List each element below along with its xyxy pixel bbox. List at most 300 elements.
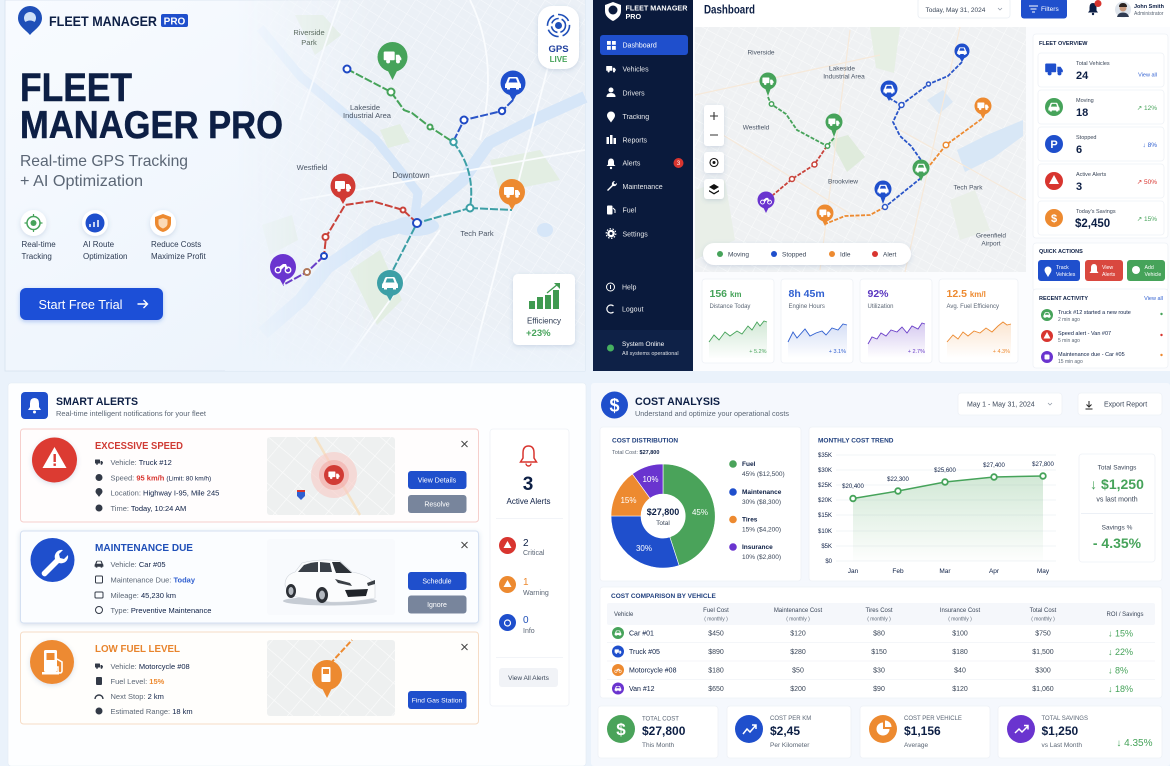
panel: fleet overview	[1033, 34, 1168, 238]
icon: fuel pump	[30, 640, 74, 684]
user avatar	[1115, 2, 1131, 18]
kpi: cost per vehicle: $1,156	[904, 724, 941, 738]
row: van 12: $120	[952, 686, 968, 693]
pin: blue car	[500, 70, 526, 101]
action: view alerts	[1085, 260, 1123, 281]
panel: recent activity: RECENT ACTIVITY	[1039, 296, 1088, 302]
maintenance details: Mileage: 45,230 km	[110, 591, 176, 600]
panel: active alerts summary: Active Alerts	[506, 497, 551, 506]
fuel details	[95, 662, 193, 716]
close button	[462, 441, 468, 447]
kpi: total cost: This Month	[642, 742, 675, 749]
kpi: total savings: vs Last Month	[1042, 742, 1082, 749]
badge: gps live: LIVE	[550, 55, 568, 64]
smart alerts header	[21, 392, 206, 419]
sidebar logo: PRO	[626, 12, 641, 21]
logo: FLEET MANAGER	[49, 13, 157, 29]
stat card: distance today: + 5.2%	[749, 349, 767, 355]
filters button	[1021, 0, 1067, 18]
action: track vehicles: Vehicles	[1056, 272, 1076, 278]
line chart: $20,400	[842, 484, 864, 490]
alert details: Time: Today, 10:24 AM	[110, 504, 186, 513]
kpi: total cost: TOTAL COST	[642, 716, 679, 722]
card: cost distribution: Total Cost: $27,800	[612, 450, 659, 456]
row: total vehicles	[1038, 53, 1164, 87]
activity: truck started: Truck #12 started a new route	[1058, 310, 1131, 316]
button: ignore	[408, 596, 466, 614]
menu items: Fuel	[622, 208, 637, 214]
notification bell	[1088, 0, 1102, 15]
table header: ( monthly )	[867, 616, 891, 622]
count: warning: Warning	[523, 590, 549, 597]
sparkline: utilization	[868, 323, 925, 358]
action: track vehicles	[1038, 260, 1080, 281]
feature: ai route optimization: AI Route	[83, 240, 115, 249]
title: FLEET	[20, 66, 132, 110]
row: car 01: ↓ 15%	[1108, 628, 1133, 638]
button: schedule: Schedule	[422, 578, 452, 586]
map place labels: Tech Park	[460, 229, 494, 238]
count: info	[499, 614, 535, 635]
cost analysis header: $	[609, 396, 620, 416]
row: van 12: ↓ 18%	[1108, 684, 1133, 694]
subtitle: + AI Optimization	[20, 173, 143, 190]
activity: maintenance due: Maintenance due - Car #05	[1058, 352, 1125, 358]
dashboard map labels: Greenfield	[976, 232, 1006, 240]
row: truck 05: $890	[708, 649, 724, 656]
savings summary: Total Savings	[1098, 464, 1137, 472]
stat card: engine hours: + 3.1%	[829, 349, 846, 355]
dashboard map labels: Tech Park	[954, 184, 983, 192]
efficiency bars	[529, 283, 560, 309]
button: view all alerts	[499, 668, 558, 687]
row: active alerts: 3	[1076, 181, 1082, 193]
stat card: utilization: Utilization	[868, 304, 894, 310]
dashboard pins	[758, 44, 992, 226]
donut legend: 10% ($2,800)	[742, 554, 781, 561]
menu items: Maintenance	[622, 184, 663, 191]
sidebar	[593, 0, 693, 371]
donut chart: Total	[656, 520, 670, 527]
kpi: total savings	[998, 706, 1162, 758]
pro badge: PRO	[164, 16, 186, 28]
action: view alerts: Alerts	[1102, 272, 1116, 278]
donut legend: 15% ($4,200)	[742, 526, 781, 534]
line chart: $22,300	[887, 477, 910, 483]
pro badge	[161, 14, 188, 28]
button: resolve	[408, 495, 466, 513]
button: view details: View Details	[418, 478, 457, 484]
kpi: total cost: $	[616, 720, 626, 739]
donut chart: 30%	[636, 544, 652, 553]
donut chart: 45%	[692, 508, 708, 517]
cost analysis header	[601, 392, 790, 418]
active menu item	[600, 35, 688, 55]
row: van 12	[612, 682, 1133, 694]
map legend: Idle	[840, 252, 851, 258]
panel: quick actions: QUICK ACTIONS	[1039, 249, 1083, 255]
savings summary: ↓ $1,250	[1090, 476, 1144, 492]
row: total vehicles: Total Vehicles	[1076, 61, 1110, 67]
system status	[607, 341, 679, 357]
panel: dashboard	[593, 0, 1170, 371]
maintenance details: Vehicle: Car #05	[110, 560, 166, 569]
card: cost distribution: COST DISTRIBUTION	[612, 438, 678, 444]
alert card: low fuel level	[20, 632, 478, 724]
savings summary: vs last month	[1096, 496, 1138, 504]
badge: efficiency: +23%	[526, 328, 551, 339]
line chart: Jan	[848, 568, 859, 575]
row: today's savings: ↗ 15%	[1137, 216, 1157, 223]
activity: truck started: 2 min ago	[1058, 317, 1080, 323]
card: cost comparison table: COST COMPARISON BY VEHICLE	[611, 593, 717, 600]
icon: bell	[520, 446, 536, 466]
row: motorcycle 08: $40	[954, 668, 966, 674]
line chart: $20K	[818, 498, 832, 504]
panel: cost analysis	[591, 383, 1170, 766]
user name	[1134, 4, 1165, 17]
pin: orange truck	[499, 179, 525, 210]
menu items: Help	[622, 284, 637, 292]
smart alerts header: SMART ALERTS	[56, 396, 138, 408]
line chart: $5K	[821, 544, 832, 550]
menu items: Dashboard	[622, 42, 657, 50]
stat card: distance today	[702, 279, 774, 363]
menu items: Drivers	[622, 90, 645, 98]
donut chart: 10%	[642, 475, 659, 484]
table header	[607, 603, 1155, 625]
kpi: total savings: ↓ 4.35%	[1116, 738, 1153, 749]
route network	[283, 69, 513, 285]
sparkline: engine	[788, 324, 847, 358]
count: info: 0	[523, 615, 529, 626]
map legend: Moving	[728, 252, 749, 258]
row: active alerts: Active Alerts	[1076, 172, 1107, 178]
system status: System Online	[622, 341, 665, 348]
line chart: $27,800	[1032, 462, 1054, 468]
panel: active alerts summary	[490, 429, 569, 706]
row: car 01: $750	[1035, 630, 1051, 638]
smart alerts header: Real-time intelligent notifications for your fleet	[56, 411, 206, 418]
alert details: Speed: 95 km/h (Limit: 80 km/h)	[110, 474, 211, 482]
subtitle: Real-time GPS Tracking	[20, 153, 188, 170]
row: truck 05: $1,500	[1032, 649, 1054, 656]
row: moving: ↗ 12%	[1137, 105, 1157, 112]
user name: Administrator	[1134, 11, 1164, 17]
maintenance details: Type: Preventive Maintenance	[110, 606, 211, 615]
row: van 12: $650	[708, 686, 724, 693]
pin: teal car	[377, 270, 403, 301]
row: today's savings: $	[1051, 213, 1057, 225]
row: car 01: $100	[952, 630, 968, 638]
row: motorcycle 08: $30	[873, 668, 885, 674]
card: cost distribution	[600, 427, 801, 581]
line chart: $35K	[818, 453, 832, 459]
row: today's savings: $2,450	[1075, 218, 1110, 230]
map place labels: Lakeside	[350, 103, 380, 112]
pin: purple motorcycle	[270, 254, 296, 285]
close button	[462, 644, 468, 650]
action: add vehicle: Vehicle	[1144, 272, 1161, 278]
row: van 12: $200	[790, 686, 806, 693]
row: van 12: $1,060	[1032, 686, 1054, 693]
activity: maintenance due	[1041, 351, 1163, 365]
kpi: cost per km: Per Kilometer	[770, 742, 810, 749]
menu items: Alerts	[622, 160, 641, 168]
kpi: total savings: TOTAL SAVINGS	[1042, 716, 1088, 722]
row: car 01: $450	[708, 630, 724, 638]
count: critical: 2	[523, 538, 529, 549]
row: motorcycle 08: ↓ 8%	[1108, 666, 1128, 676]
button: view all alerts: View All Alerts	[508, 675, 550, 682]
line chart	[818, 453, 1056, 575]
row: moving: 18	[1076, 107, 1088, 119]
alert card: maintenance due: MAINTENANCE DUE	[95, 542, 193, 554]
dashboard map labels: Riverside	[747, 50, 775, 56]
header	[693, 0, 1170, 27]
route nodes	[304, 66, 505, 275]
line chart: Feb	[892, 568, 904, 575]
feature: real-time tracking	[20, 210, 56, 261]
map: dashboard	[695, 27, 1026, 272]
cost analysis header: Understand and optimize your operational costs	[635, 411, 790, 418]
panel: quick actions	[1033, 243, 1168, 291]
button: schedule	[408, 572, 466, 590]
row: active alerts: ↗ 50%	[1137, 179, 1157, 186]
count: critical: Critical	[523, 550, 545, 557]
kpi: total cost: $27,800	[642, 724, 686, 738]
menu items: Logout	[622, 306, 643, 314]
alert details	[95, 458, 219, 513]
alerts badge	[674, 158, 684, 168]
icon: warning	[32, 438, 77, 482]
row: stopped: ↓ 8%	[1143, 142, 1157, 149]
row: motorcycle 08: Motorcycle #08	[629, 668, 677, 674]
stat card: utilization	[860, 279, 932, 363]
action: view alerts: View	[1102, 265, 1113, 271]
row: today's savings	[1038, 201, 1164, 235]
row: car 01: $80	[873, 630, 885, 638]
map legend: Stopped	[782, 252, 807, 258]
stat card: fuel efficiency: Avg. Fuel Efficiency	[946, 304, 999, 310]
stat card: distance today: 156 km	[710, 288, 742, 300]
kpi: cost per vehicle: COST PER VEHICLE	[904, 716, 962, 722]
icon: wrench	[30, 538, 74, 582]
sidebar logo	[605, 2, 688, 21]
map place labels: Riverside	[293, 28, 325, 37]
export report: Export Report	[1104, 402, 1147, 408]
dashboard map labels: Airport	[981, 240, 1001, 248]
feature: real-time tracking: Tracking	[22, 252, 52, 261]
button: resolve: Resolve	[424, 502, 450, 508]
feature: ai route optimization	[82, 210, 127, 261]
maintenance details: Maintenance Due: Today	[110, 576, 196, 584]
row: motorcycle 08: $180	[708, 668, 724, 674]
line chart: May	[1037, 568, 1050, 575]
table header: ( monthly )	[704, 616, 728, 622]
count: warning	[499, 576, 549, 597]
activity: maintenance due: 15 min ago	[1058, 359, 1083, 365]
pin: red truck	[330, 174, 356, 204]
map zoom control	[704, 105, 724, 146]
hero map	[225, 0, 585, 371]
badge: efficiency	[513, 274, 575, 345]
donut legend: Maintenance	[742, 489, 782, 496]
stat card: engine hours: 8h 45m	[788, 288, 825, 300]
row: motorcycle 08: $50	[792, 668, 804, 674]
line chart: Mar	[939, 568, 951, 575]
sparkline: distance	[709, 321, 767, 358]
date range	[958, 393, 1062, 415]
menu items	[622, 42, 663, 314]
sidebar logo: FLEET MANAGER	[626, 4, 688, 12]
alert details: Vehicle: Truck #12	[110, 458, 172, 467]
user name: John Smith	[1134, 4, 1165, 10]
savings summary	[1079, 454, 1155, 562]
menu items: Reports	[622, 138, 648, 144]
fuel details: Fuel Level: 15%	[110, 677, 165, 686]
alerts badge: 3	[677, 161, 681, 167]
map layers control	[704, 179, 724, 199]
dashboard routes	[768, 62, 983, 224]
kpi: cost per km: COST PER KM	[770, 716, 811, 722]
card: monthly cost trend	[809, 427, 1162, 581]
panel: smart alerts	[8, 383, 586, 766]
row: today's savings: Today's Savings	[1076, 209, 1116, 215]
savings summary: Savings %	[1102, 524, 1133, 532]
menu items: Settings	[622, 232, 648, 238]
dashboard map labels	[743, 50, 1006, 248]
map place labels	[293, 28, 494, 238]
savings summary: - 4.35%	[1093, 535, 1142, 551]
fuel details: Next Stop: 2 km	[110, 692, 164, 701]
dashboard map labels: Lakeside	[829, 66, 855, 72]
button: start free trial	[20, 288, 163, 320]
donut chart: $27,800	[647, 507, 679, 517]
line chart: $30K	[818, 468, 832, 474]
row: moving: Moving	[1076, 98, 1094, 104]
menu items: Tracking	[622, 114, 649, 121]
activity: speed alert	[1041, 330, 1163, 344]
car image	[267, 539, 395, 615]
donut legend: 45% ($12,500)	[742, 471, 785, 478]
table header: Insurance Cost	[940, 608, 981, 614]
panel: fleet overview: FLEET OVERVIEW	[1039, 41, 1088, 47]
row: total vehicles: 24	[1076, 70, 1089, 82]
donut legend: Insurance	[742, 544, 773, 551]
fuel details: Vehicle: Motorcycle #08	[110, 662, 190, 671]
sparkline: efficiency	[947, 322, 1011, 358]
feature: reduce costs: Maximize Profit	[151, 252, 206, 261]
stat card: fuel efficiency: + 4.3%	[993, 349, 1010, 355]
alert card: maintenance due	[20, 531, 478, 623]
row: truck 05	[612, 646, 1133, 658]
activity: speed alert: Speed alert - Van #07	[1058, 331, 1111, 337]
feature: reduce costs: Reduce Costs	[151, 240, 201, 249]
feature: ai route optimization: Optimization	[83, 252, 127, 261]
activity: truck started	[1041, 309, 1163, 323]
panel: active alerts summary: 3	[523, 474, 533, 495]
button: find gas station: Find Gas Station	[412, 698, 463, 704]
row: truck 05: ↓ 22%	[1108, 647, 1133, 657]
row: stopped	[1038, 127, 1164, 161]
row: stopped: P	[1050, 139, 1058, 151]
row: moving	[1038, 90, 1164, 124]
table header: ( monthly )	[786, 616, 810, 622]
count: critical	[499, 537, 545, 557]
table header: Total Cost	[1030, 608, 1057, 614]
map place labels: Downtown	[392, 171, 430, 180]
row: total vehicles: View all	[1138, 72, 1157, 78]
alert card: excessive speed	[20, 429, 478, 522]
stat card: engine hours	[781, 279, 853, 363]
map place labels: Westfield	[297, 163, 327, 172]
badge: efficiency: Efficiency	[527, 316, 561, 326]
action: track vehicles: Track	[1056, 265, 1069, 271]
donut legend	[729, 460, 785, 561]
fuel map thumbnail	[267, 640, 395, 716]
kpi: cost per km: $2,45	[770, 724, 800, 738]
logo pin icon	[18, 6, 42, 35]
row: motorcycle 08	[612, 664, 1128, 676]
table header: Maintenance Cost	[774, 608, 823, 614]
line chart: $25K	[818, 483, 832, 489]
count: info: Info	[523, 628, 535, 635]
alert details: Location: Highway I-95, Mile 245	[110, 488, 219, 498]
date picker	[918, 0, 1010, 18]
row: van 12: Van #12	[629, 686, 655, 693]
button: ignore: Ignore	[427, 602, 447, 609]
close button	[462, 542, 468, 548]
cost analysis header: COST ANALYSIS	[635, 396, 720, 408]
kpi: cost per vehicle	[860, 706, 990, 758]
kpi: cost per km	[727, 706, 851, 758]
card: monthly cost trend: MONTHLY COST TREND	[818, 438, 894, 444]
filters button: Filters	[1041, 6, 1059, 13]
table header: ( monthly )	[1031, 616, 1055, 622]
row: car 01: $120	[790, 630, 806, 638]
row: stopped: Stopped	[1076, 135, 1096, 141]
row: motorcycle 08: $300	[1035, 668, 1051, 674]
kpi: total savings: $1,250	[1042, 724, 1079, 738]
fuel details: Estimated Range: 18 km	[110, 707, 193, 716]
map legend: Alert	[883, 252, 897, 258]
row: truck 05: Truck #05	[629, 649, 660, 656]
maintenance details	[95, 560, 211, 615]
card: cost comparison table	[600, 587, 1162, 698]
row: truck 05: $150	[871, 649, 887, 656]
map locate control	[704, 152, 724, 173]
button: start free trial: Start Free Trial	[38, 297, 123, 312]
dashboard map labels: Industrial Area	[823, 74, 865, 80]
alert card: low fuel level: LOW FUEL LEVEL	[95, 643, 181, 655]
panel: hero	[5, 0, 585, 371]
alert map thumbnail	[267, 437, 395, 515]
title	[20, 66, 283, 147]
dashboard map labels: Brookview	[828, 178, 858, 186]
count: warning: 1	[523, 577, 529, 588]
badge: gps live	[538, 6, 579, 69]
panel: recent activity	[1033, 289, 1168, 368]
stat card: fuel efficiency	[939, 279, 1018, 363]
feature: real-time tracking: Real-time	[22, 240, 56, 249]
row: stopped: 6	[1076, 144, 1082, 156]
line chart: $15K	[818, 513, 832, 519]
line chart: $10K	[818, 529, 832, 535]
header: Dashboard	[704, 4, 755, 16]
date picker: Today, May 31, 2024	[926, 7, 986, 14]
line chart: Apr	[989, 568, 1000, 575]
